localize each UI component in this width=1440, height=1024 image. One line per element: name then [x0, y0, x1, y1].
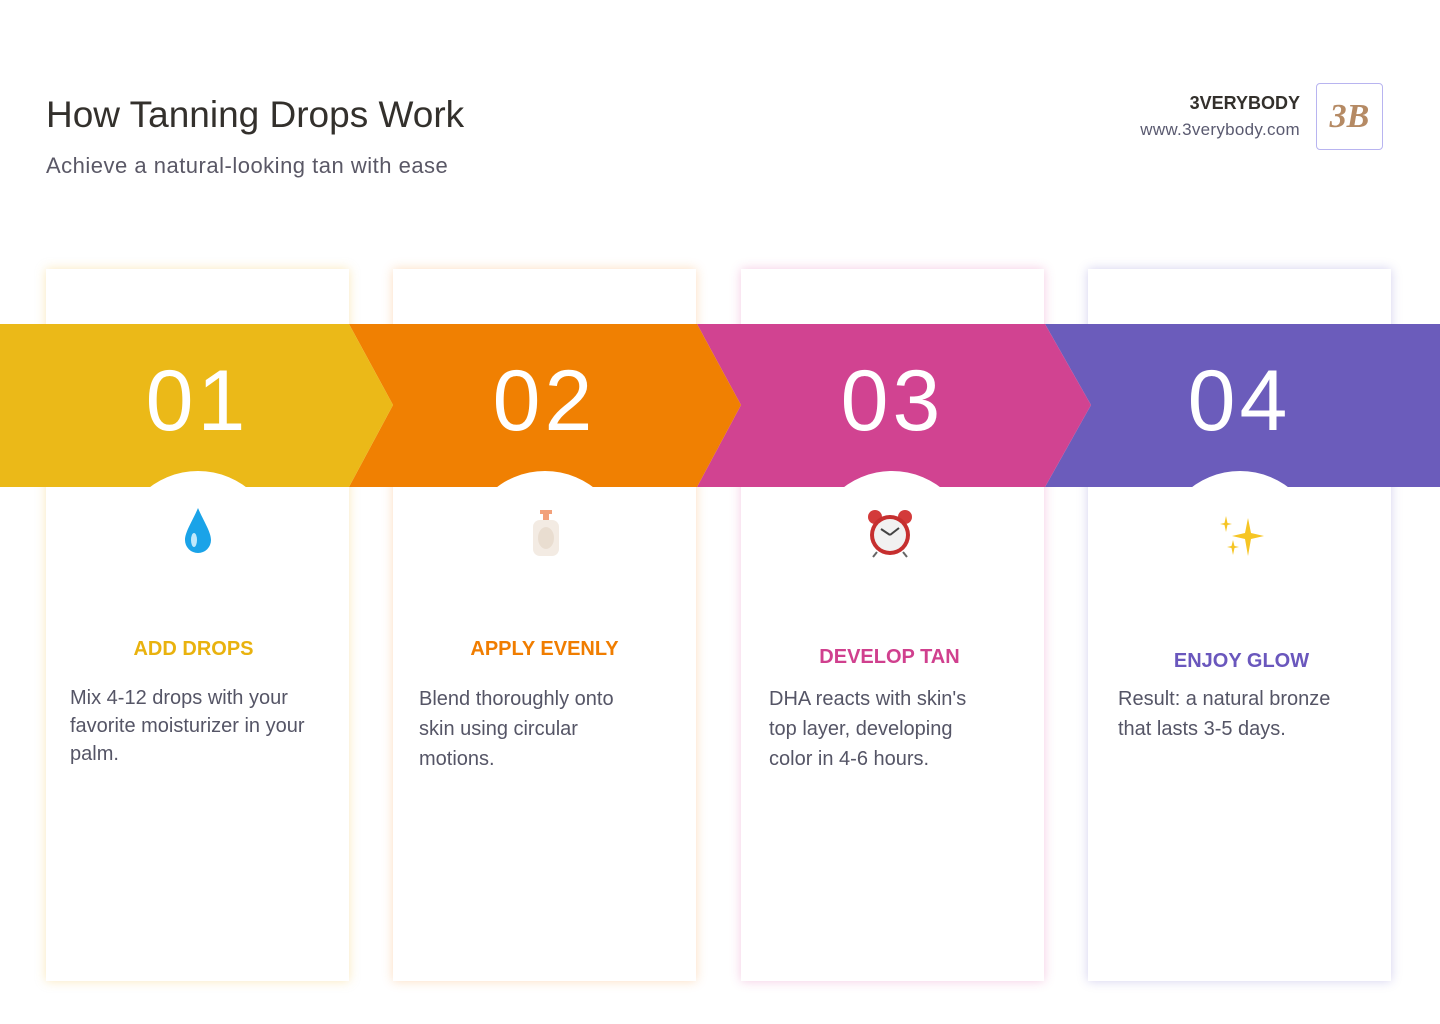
brand name: 3VERYBODY: [1190, 93, 1300, 113]
text: 02: [493, 353, 596, 449]
text: 03: [841, 353, 944, 449]
brand block: [1140, 83, 1383, 150]
panel: step 1 card: [46, 269, 349, 981]
logo: 3B: [1330, 98, 1369, 134]
icon: water drop: [185, 508, 211, 553]
panel: step 4 card: [1088, 269, 1391, 981]
step 1 title: ADD DROPS: [133, 638, 254, 660]
step 2 text: Blend thoroughly onto skin using circular motions.: [419, 688, 614, 770]
step 1 text: Mix 4-12 drops with your favorite moisturizer in your palm.: [70, 687, 305, 765]
logo: [1316, 83, 1383, 150]
text: 04: [1188, 353, 1291, 449]
subtitle: Achieve a natural-looking tan with ease: [46, 153, 448, 178]
step 4 title: ENJOY GLOW: [1174, 650, 1309, 672]
brand url: www.3verybody.com: [1140, 120, 1300, 139]
icon: alarm clock: [868, 510, 912, 558]
step 4 text: Result: a natural bronze that lasts 3-5 days.: [1118, 688, 1330, 740]
step numbers: 01: [146, 353, 249, 449]
icon circles: [118, 471, 278, 631]
step 2 title: APPLY EVENLY: [470, 638, 619, 660]
icon: lotion bottle: [533, 510, 559, 556]
step 3 text: DHA reacts with skin's top layer, developing color in 4-6 hours.: [769, 688, 966, 770]
panel: step 2 card: [393, 269, 696, 981]
arrow band: [0, 324, 1440, 487]
step 3 title: DEVELOP TAN: [819, 646, 960, 668]
title: How Tanning Drops Work: [46, 94, 464, 135]
panel: step 3 card: [741, 269, 1044, 981]
icon: sparkles: [1220, 516, 1264, 556]
